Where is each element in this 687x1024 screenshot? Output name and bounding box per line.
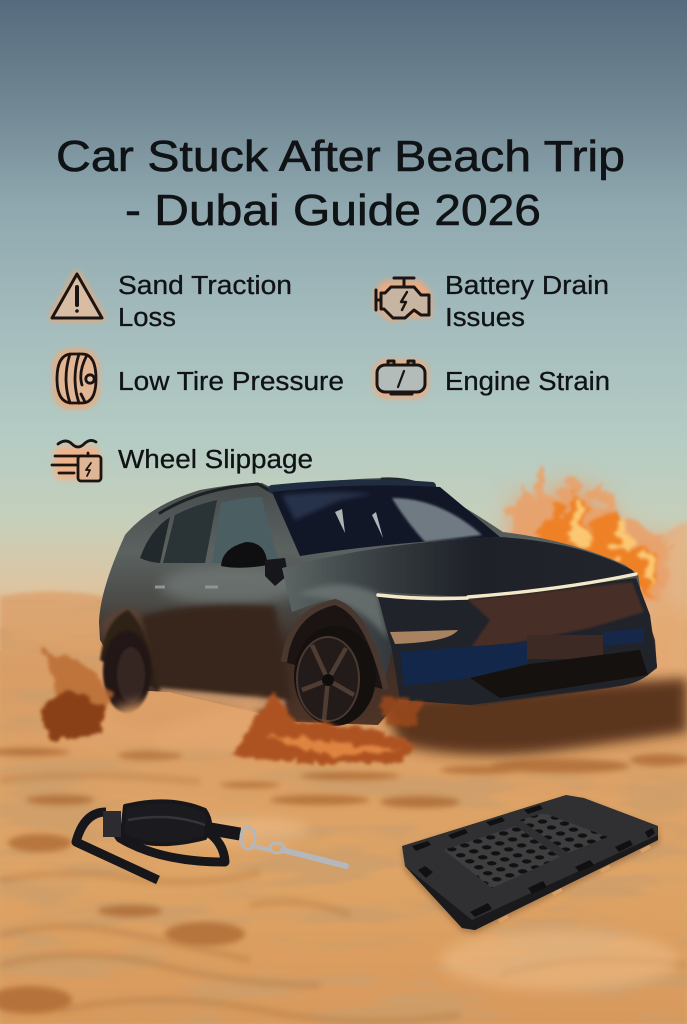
metal hook bbox=[241, 827, 346, 866]
side mirror bbox=[221, 542, 288, 586]
rear wheel bbox=[100, 610, 158, 713]
icon: speed battery bbox=[52, 440, 101, 481]
icon: warning triangle bbox=[52, 274, 102, 318]
icon: car battery gauge bbox=[376, 361, 426, 396]
label line 2: Loss bbox=[118, 304, 176, 332]
item: low tire pressure bbox=[56, 352, 344, 406]
sand spray: rear wheel bbox=[40, 650, 260, 740]
sand spray: front wheel bbox=[150, 692, 422, 763]
ground shadow under car bbox=[380, 678, 687, 755]
fog lamp bbox=[390, 630, 458, 644]
flames behind the car bbox=[505, 462, 668, 610]
lower grille bbox=[470, 650, 648, 698]
strap bbox=[76, 801, 240, 880]
item: battery drain issues bbox=[376, 272, 609, 332]
number plate area bbox=[527, 635, 603, 659]
hood and fender bbox=[282, 537, 636, 680]
item: sand traction loss bbox=[52, 272, 292, 332]
background: desert sand bbox=[0, 522, 687, 1024]
background: sky bbox=[0, 0, 687, 650]
label: wheel slippage: Wheel Slippage bbox=[118, 446, 313, 474]
icon: engine warning bbox=[376, 278, 430, 320]
icon: tire bbox=[56, 352, 96, 406]
car body bbox=[99, 478, 657, 725]
front fascia bbox=[378, 578, 657, 705]
title bbox=[56, 132, 625, 235]
suv bbox=[99, 478, 687, 755]
label: low tire pressure: Low Tire Pressure bbox=[118, 368, 344, 396]
label: battery drain issues: Battery Drain bbox=[445, 272, 609, 300]
label line 2: Issues bbox=[445, 304, 525, 332]
label: sand traction loss: Sand Traction bbox=[118, 272, 292, 300]
rear side window bbox=[140, 517, 170, 563]
title: Car Stuck After Beach Trip bbox=[56, 132, 625, 181]
front wheel bbox=[284, 602, 386, 726]
side panel shading bbox=[100, 565, 300, 712]
label: engine strain: Engine Strain bbox=[445, 368, 610, 396]
traction recovery board bbox=[402, 795, 660, 933]
dust cloud behind the car bbox=[40, 600, 687, 745]
title: - Dubai Guide 2026 bbox=[125, 186, 541, 235]
recovery strap with hook bbox=[76, 801, 346, 880]
roof rails bbox=[160, 479, 432, 513]
front side window bbox=[212, 497, 279, 564]
door handles bbox=[155, 586, 218, 588]
drl light strip bbox=[378, 574, 636, 599]
blue lower panels bbox=[400, 642, 528, 686]
item: wheel slippage bbox=[52, 440, 313, 481]
windshield bbox=[272, 485, 500, 556]
middle side window bbox=[163, 500, 217, 563]
item: engine strain bbox=[376, 361, 610, 396]
